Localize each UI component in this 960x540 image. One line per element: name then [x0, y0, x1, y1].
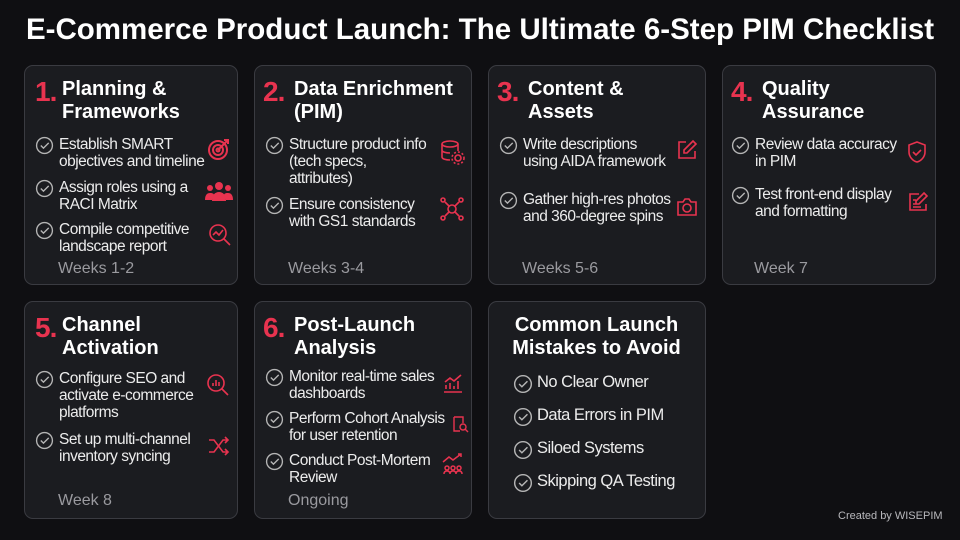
heading: Data Enrichment — [294, 78, 453, 100]
icon: camera — [677, 198, 697, 216]
heading — [294, 78, 453, 123]
panel: step 6 — [254, 301, 472, 519]
item: Gather high-res photos — [523, 191, 671, 208]
item: (tech specs, — [289, 153, 367, 170]
icon: team — [205, 182, 233, 201]
item: Ensure consistency — [289, 196, 414, 213]
item: for user retention — [289, 427, 397, 444]
item: objectives and timeline — [59, 153, 204, 170]
timing: Weeks 5-6 — [522, 260, 598, 277]
heading: Assets — [528, 101, 594, 123]
item — [500, 136, 666, 170]
icon: database — [441, 140, 465, 165]
number 3: 3. — [497, 76, 518, 107]
item: Data Errors in PIM — [537, 406, 664, 424]
title: E-Commerce Product Launch: The Ultimate 6-Step PIM Checklist — [26, 13, 934, 46]
icon: bar chart — [444, 374, 462, 393]
item — [36, 179, 188, 213]
item: Establish SMART — [59, 136, 173, 153]
heading — [762, 78, 864, 123]
timing: Weeks 3-4 — [288, 260, 364, 277]
item: with GS1 standards — [289, 213, 415, 230]
item — [36, 136, 204, 170]
item: Structure product info — [289, 136, 426, 153]
heading: Common Launch — [515, 314, 678, 336]
heading: Frameworks — [62, 101, 180, 123]
number 2: 2. — [263, 76, 284, 107]
number 1: 1. — [35, 76, 56, 107]
icon: edit — [678, 140, 697, 159]
panel: step 3 — [488, 65, 706, 285]
item: Monitor real-time sales — [289, 368, 434, 385]
item: Configure SEO and — [59, 370, 185, 387]
credit: Created by WISEPIM — [838, 510, 943, 522]
heading — [294, 314, 415, 359]
item — [500, 191, 671, 225]
icon: magnifier chart — [209, 224, 230, 246]
item — [732, 186, 892, 220]
panel: step 4 — [722, 65, 936, 285]
heading — [62, 78, 180, 123]
heading: Quality — [762, 78, 830, 100]
panel: step 1 — [24, 65, 238, 285]
item: Review — [289, 469, 337, 486]
heading: Channel — [62, 314, 141, 336]
item: landscape report — [59, 238, 166, 255]
number 4: 4. — [731, 76, 752, 107]
item — [266, 452, 430, 486]
heading: (PIM) — [294, 101, 343, 123]
item: attributes) — [289, 170, 352, 187]
heading: Analysis — [294, 337, 376, 359]
item: inventory syncing — [59, 448, 170, 465]
item — [266, 136, 426, 187]
timing: Ongoing — [288, 492, 348, 509]
timing: Weeks 1-2 — [58, 260, 134, 277]
icon: shield — [908, 141, 926, 163]
icon: shuffle — [209, 436, 229, 456]
heading — [528, 78, 624, 123]
icon: people trend — [442, 453, 463, 474]
item: Test front-end display — [755, 186, 891, 203]
item: No Clear Owner — [537, 373, 648, 391]
item — [266, 368, 434, 402]
item — [36, 431, 190, 465]
item: Review data accuracy — [755, 136, 897, 153]
icon: search analytics — [207, 374, 228, 396]
item: Compile competitive — [59, 221, 189, 238]
heading: Mistakes to Avoid — [512, 337, 681, 359]
icon: checklist edit — [909, 192, 928, 211]
heading: Content & — [528, 78, 624, 100]
item: and 360-degree spins — [523, 208, 663, 225]
item: and formatting — [755, 203, 847, 220]
item: activate e-commerce — [59, 387, 193, 404]
item — [732, 136, 898, 170]
item — [36, 370, 194, 421]
number 5: 5. — [35, 312, 56, 343]
item: Perform Cohort Analysis — [289, 410, 445, 427]
item: Write descriptions — [523, 136, 637, 153]
heading: Assurance — [762, 101, 864, 123]
item — [36, 221, 189, 255]
heading: Activation — [62, 337, 159, 359]
item: Skipping QA Testing — [537, 472, 675, 490]
panel: mistakes — [488, 301, 706, 519]
number 6: 6. — [263, 312, 284, 343]
item — [266, 410, 445, 444]
item — [266, 196, 416, 230]
item: in PIM — [755, 153, 796, 170]
item: dashboards — [289, 385, 365, 402]
heading — [62, 314, 159, 359]
icon: doc search — [453, 416, 468, 432]
heading — [512, 314, 681, 359]
heading: Planning & — [62, 78, 166, 100]
item: Conduct Post-Mortem — [289, 452, 430, 469]
heading: Post-Launch — [294, 314, 415, 336]
item: using AIDA framework — [523, 153, 665, 170]
panel: step 2 — [254, 65, 472, 285]
item: Assign roles using a — [59, 179, 188, 196]
icon: target — [208, 139, 229, 160]
item: RACI Matrix — [59, 196, 137, 213]
item: Set up multi-channel — [59, 431, 190, 448]
timing: Week 7 — [754, 260, 808, 277]
item: platforms — [59, 404, 118, 421]
item: Siloed Systems — [537, 439, 644, 457]
icon: network — [440, 197, 464, 221]
timing: Week 8 — [58, 492, 112, 509]
panel: step 5 — [24, 301, 238, 519]
